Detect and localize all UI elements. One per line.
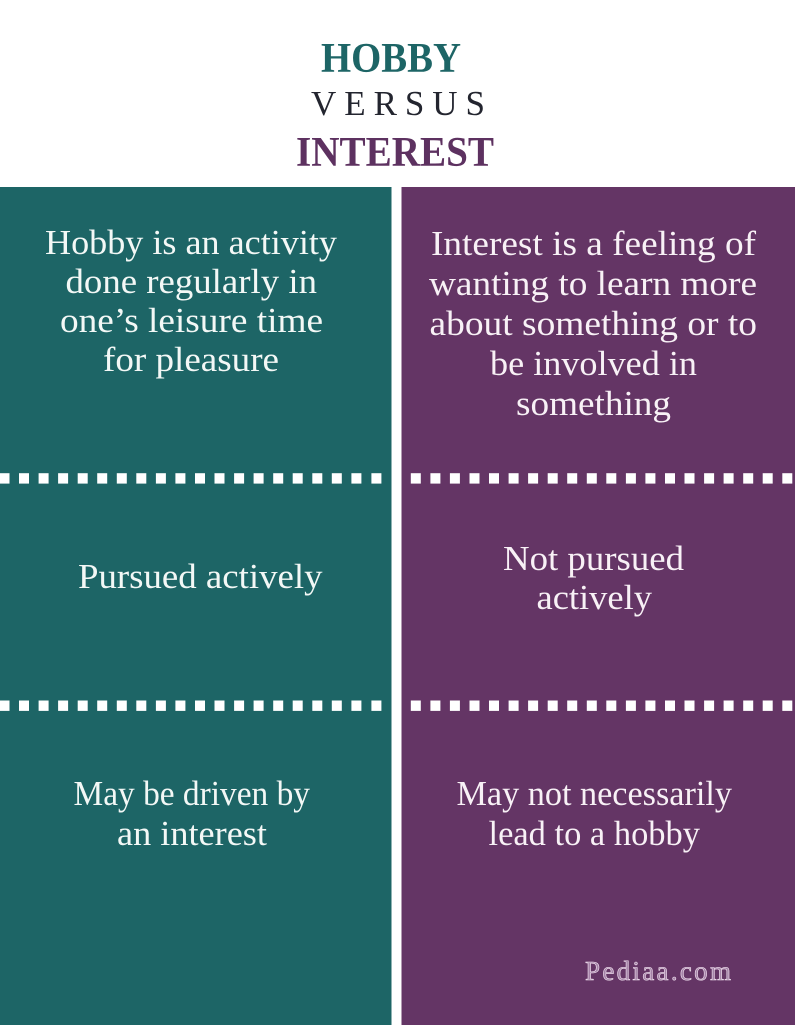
text: interest pursuit: actively [536,578,653,617]
text: hobby definition: for pleasure [103,340,279,379]
text: interest definition: be involved in [490,344,697,383]
text: hobby definition: Hobby is an activity [45,223,338,262]
text: hobby motivation: an interest [117,814,267,853]
text: interest pursuit: Not pursued [503,539,685,578]
text: interest outcome: lead to a hobby [488,814,700,853]
text: interest definition: something [516,384,671,423]
text: hobby definition: one’s leisure time [60,301,323,340]
text: hobby motivation [74,774,310,853]
logo: Pediaa.com: Pediaa.com [585,956,731,986]
text: hobby definition [45,223,338,379]
panel: hobby [0,187,392,1025]
text: hobby pursuit: Pursued actively [78,557,323,596]
text: hobby definition: done regularly in [66,262,317,301]
text: interest pursuit [503,539,685,617]
text: interest definition: about something or to [430,304,757,343]
text: interest definition [429,224,757,423]
title: INTEREST [296,130,494,176]
text: hobby motivation: May be driven by [74,774,310,813]
title: HOBBY [321,36,461,82]
title: VERSUS [311,84,485,123]
text: interest outcome [456,774,732,853]
text: interest definition: wanting to learn more [429,264,757,303]
text: interest definition: Interest is a feeling of [431,224,756,263]
panel: interest [402,187,795,1025]
text: interest outcome: May not necessarily [456,774,732,813]
title [296,36,494,176]
